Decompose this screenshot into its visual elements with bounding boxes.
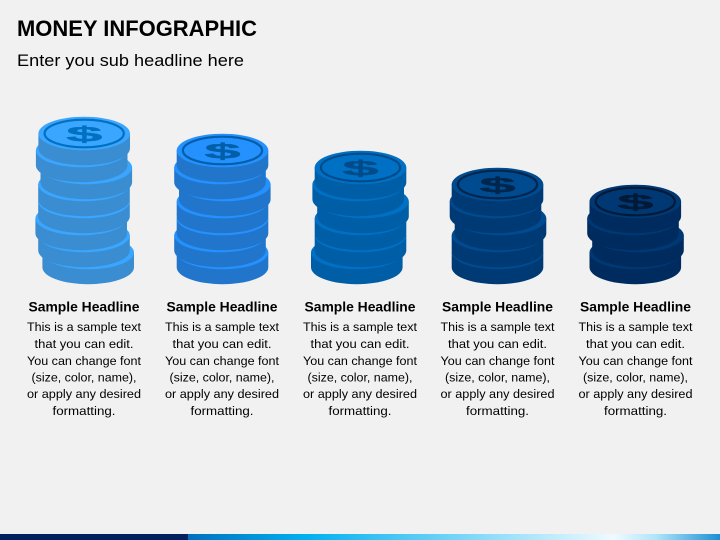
text block 1: This is a sample text bbox=[27, 320, 142, 334]
text block 3: This is a sample text bbox=[303, 320, 418, 334]
text block 2: (size, color, name), bbox=[170, 370, 274, 384]
text block 4: Sample Headline bbox=[442, 300, 553, 315]
text block 1: or apply any desired bbox=[27, 387, 141, 401]
coin stack 3 bbox=[311, 151, 409, 284]
text block 4: This is a sample text bbox=[440, 320, 555, 334]
subtitle: Enter you sub headline here bbox=[17, 51, 244, 70]
coin stack 1: $ bbox=[66, 123, 102, 147]
text block 5: (size, color, name), bbox=[583, 370, 688, 384]
coin stack 5: $ bbox=[617, 191, 654, 215]
text block 5: that you can edit. bbox=[586, 337, 685, 351]
coin stack 4: $ bbox=[479, 174, 516, 198]
text block 3: formatting. bbox=[328, 404, 392, 418]
coin stack 5 bbox=[587, 185, 684, 284]
text block 2: that you can edit. bbox=[172, 337, 272, 351]
title: MONEY INFOGRAPHIC bbox=[17, 16, 257, 41]
text block 1: Sample Headline bbox=[28, 300, 140, 315]
coin stack 3: $ bbox=[342, 157, 379, 181]
text block 5: You can change font bbox=[578, 354, 693, 368]
text block 5: formatting. bbox=[604, 404, 667, 418]
text block 2: or apply any desired bbox=[165, 387, 279, 401]
text block 3 bbox=[303, 300, 418, 418]
coin stack 4 bbox=[450, 168, 546, 284]
coin stack 1 bbox=[35, 117, 134, 284]
text block 1: that you can edit. bbox=[34, 337, 134, 351]
text block 2: This is a sample text bbox=[165, 320, 280, 334]
text block 4 bbox=[440, 300, 555, 418]
text block 1: You can change font bbox=[27, 354, 142, 368]
text block 1: formatting. bbox=[52, 404, 116, 418]
text block 3: that you can edit. bbox=[310, 337, 410, 351]
text block 5: This is a sample text bbox=[578, 320, 693, 334]
text block 3: (size, color, name), bbox=[308, 370, 412, 384]
text block 3: or apply any desired bbox=[303, 387, 417, 401]
text block 2: Sample Headline bbox=[166, 300, 278, 315]
text block 5: or apply any desired bbox=[578, 387, 692, 401]
coin stack 2 bbox=[174, 134, 271, 284]
text block 1: (size, color, name), bbox=[32, 370, 136, 384]
text block 2: You can change font bbox=[165, 354, 280, 368]
coin stack 2: $ bbox=[204, 140, 241, 164]
text block 3: You can change font bbox=[303, 354, 418, 368]
text block 3: Sample Headline bbox=[304, 300, 416, 315]
text block 4: that you can edit. bbox=[448, 337, 547, 351]
footer bar bbox=[0, 534, 720, 540]
text block 2 bbox=[165, 300, 280, 418]
text block 5: Sample Headline bbox=[580, 300, 691, 315]
text block 5 bbox=[578, 300, 693, 418]
text block 4: (size, color, name), bbox=[445, 370, 550, 384]
text block 2: formatting. bbox=[190, 404, 254, 418]
text block 4: or apply any desired bbox=[440, 387, 554, 401]
text block 4: formatting. bbox=[466, 404, 529, 418]
text block 4: You can change font bbox=[440, 354, 555, 368]
text block 1 bbox=[27, 300, 142, 418]
